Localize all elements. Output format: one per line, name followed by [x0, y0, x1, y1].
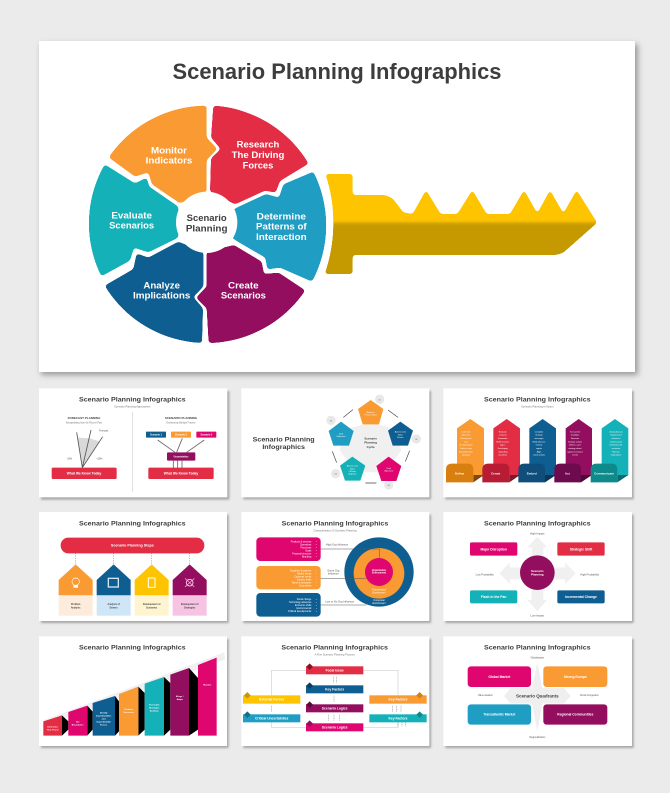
box: key factors right upper: Key Factors: [388, 698, 408, 702]
pentagon cycle diagram: Assess Cost: [395, 431, 406, 434]
segment: research the driving forces: The Driving: [232, 150, 284, 160]
center label: Scenario Quadrants: [516, 694, 559, 699]
icon: yellow key: [325, 174, 597, 274]
step: problem analysis: Problem: [71, 604, 80, 606]
step: set boundaries: [68, 706, 87, 736]
panel: ascending steps slide: [39, 636, 229, 748]
quadrant: strategic shift: Strategic Shift: [570, 547, 593, 551]
step: development of scenarios: [135, 564, 169, 616]
quadrant: strong europe: [543, 666, 607, 687]
banner: scenario planning steps: Scenario Planning Steps: [111, 544, 154, 548]
column: communicate: Clearly discuss: [609, 430, 623, 433]
box: low influence factors: Political developments: [288, 610, 312, 613]
column: communicate: [591, 419, 628, 482]
segment: determine patterns of interaction: Determine: [257, 211, 306, 221]
box: some influence factors: Industry rivals: [297, 578, 312, 581]
column: communicate: timeframes for: [610, 444, 623, 447]
slide title: [253, 436, 315, 451]
box: key factors right lower: [369, 711, 427, 722]
column: act: Test current: [570, 430, 581, 433]
column: create: Developing: [498, 448, 508, 450]
column: create: narratives: [498, 454, 507, 457]
column: create: compelling: [498, 451, 507, 453]
column: act: strategic actions: [568, 440, 582, 443]
pentagon cycle diagram: 04: [335, 474, 338, 476]
step: development of strategies: [173, 564, 207, 616]
column: create: [482, 419, 520, 482]
step: determine time frame: Determine: [47, 726, 59, 729]
quadrant: transatlantic market: [468, 704, 531, 725]
box: high influence factors: Products & services: [291, 541, 312, 544]
column: communicate: implications: [611, 454, 621, 457]
box: low influence factors: [256, 593, 321, 617]
step: identify forces: Impredictables: [96, 714, 112, 717]
quadrant: regional communities: [543, 704, 607, 725]
axis labels: Low Probability: [476, 572, 494, 576]
step: produce scenarios: Scenarios: [124, 712, 135, 714]
slide subtitle: Scenario Planning in Action: [521, 404, 554, 408]
pentagon cycle diagram: Cycle: [367, 445, 375, 449]
scenario planning column: Scenario 2: [175, 435, 188, 437]
column: embed: strategic: [535, 434, 543, 437]
influence labels: Low or No Org Influence: [325, 600, 355, 604]
step: identify forces: and: [102, 718, 106, 720]
axis labels: Low Impact: [531, 613, 544, 617]
column: act: Create: [572, 454, 579, 457]
step: set boundaries: Set: [76, 720, 80, 723]
box: some influence factors: Competitors: [299, 584, 312, 587]
concentric environment circles: [344, 537, 414, 607]
pentagon cycle diagram: Objectives: [384, 470, 393, 473]
forecast planning column: [52, 416, 117, 479]
quadrant: incremental change: [557, 590, 605, 603]
column: act: Act: [565, 471, 570, 475]
quadrant: strong europe: Strong Europe: [564, 675, 587, 679]
panel: scenario planning in action slide: [443, 388, 634, 499]
influence labels: High Org Influence: [326, 543, 349, 547]
column: communicate: importance &: [610, 434, 623, 437]
box: low influence factors: Economic shifts: [295, 604, 312, 607]
panel: scenario planning cycle slide: [241, 388, 431, 499]
slide subtitle: Characteristics Of Scenario Planning: [313, 528, 357, 532]
forecast planning column: +15%: [96, 458, 102, 460]
quadrant: flash in the pan: Flash in the Pan: [481, 595, 506, 599]
segment: monitor indicators: Monitor: [151, 145, 188, 155]
box: key factors center: Key Factors: [325, 688, 344, 692]
box: low influence factors: Social change: [297, 599, 312, 601]
step: monitor: [198, 658, 217, 736]
column: communicate: Communicate: [610, 440, 623, 443]
step: produce scenarios: Produce: [124, 709, 134, 711]
column: define: area: [464, 440, 469, 443]
segment: determine patterns of interaction: [213, 172, 326, 282]
black step shadows: [62, 668, 198, 736]
segment: research the driving forces: Forces: [243, 160, 273, 170]
step: monitor: Monitor: [203, 684, 211, 687]
axis labels: [476, 531, 600, 617]
box: high influence factors: Processes: [300, 547, 312, 550]
step: identify forces: Identify: [100, 711, 108, 714]
forecast planning column: Extrapolating from the Recent Past: [66, 421, 102, 424]
center circle: Scenario: [531, 569, 544, 573]
step: merge adapt: Merge /: [176, 696, 184, 698]
box: focal issue: [306, 663, 363, 674]
grey star cross: [504, 662, 571, 732]
column: embed: Build alliances: [533, 441, 545, 443]
wheel diagram: [89, 106, 326, 343]
forecast planning column: -15%: [67, 458, 72, 460]
pentagon cycle diagram: Value: [398, 434, 404, 436]
scenario planning column: [146, 416, 216, 479]
scenario planning column: Envisioning Multiple Futures: [166, 421, 196, 424]
column: act: against scenarios: [567, 450, 583, 453]
box: key factors right upper: [369, 692, 427, 704]
scenario planning column: What We Know Today: [164, 472, 198, 476]
segment: evaluate scenarios: Scenarios: [109, 221, 154, 231]
center circle: [520, 555, 555, 590]
column: define: Determine: [461, 430, 471, 433]
step: formulate strategies: Strategies: [149, 706, 160, 709]
scenario planning column: Scenario 1: [150, 435, 163, 437]
banner: scenario planning steps: [61, 538, 204, 553]
concentric environment circles: Environment: [372, 591, 386, 594]
step: formulate strategies: Analysis: [150, 709, 160, 712]
hub: scenario planning: [176, 192, 237, 253]
segment: monitor indicators: Indicators: [146, 155, 192, 165]
step: determine time frame: Time Frame: [47, 729, 59, 731]
slide title: Scenario Planning Infographics: [79, 396, 186, 403]
forecast planning column: Forecast: [99, 430, 109, 433]
slide title: Scenario Planning Infographics: [484, 644, 591, 651]
hub: scenario planning: Planning: [186, 224, 227, 234]
column: act: Generate: [571, 437, 580, 440]
segment: research the driving forces: Research: [237, 140, 279, 150]
quadrant: major disruption: [470, 542, 517, 556]
pentagon cycle diagram: Estimate: [367, 411, 375, 414]
scenario planning column: Uncertainties: [174, 456, 189, 459]
center circle: Planning: [531, 573, 544, 577]
slide subtitle: A Five Scenario Planning Process: [315, 652, 355, 656]
column: create: Evaluate: [499, 430, 507, 433]
panel: impact probability matrix slide: [443, 512, 634, 623]
column: create: framework: [498, 437, 507, 440]
box: some influence factors: Market trends: [297, 572, 312, 575]
box: some influence factors: Customer needs: [294, 575, 312, 578]
pentagon cycle diagram: Drivers: [397, 436, 403, 439]
pentagon cycle diagram: Scenario: [364, 436, 377, 440]
box: some influence factors: Suppliers & partners: [290, 569, 312, 572]
column: define: [446, 419, 484, 482]
segment: analyze implications: Implications: [133, 291, 190, 301]
box: some influence factors: Talent & innovation: [292, 581, 312, 584]
step: merge adapt: [170, 668, 189, 736]
slide title: Scenario Planning Infographics: [484, 520, 591, 527]
pentagon cycle diagram: 05: [330, 420, 333, 422]
pentagon cycle diagram: 03: [388, 485, 391, 487]
segment: research the driving forces: [210, 106, 309, 204]
step: produce scenarios: [119, 687, 138, 736]
forecast planning column: FORECAST PLANNING: [68, 416, 101, 420]
column: act: [554, 419, 592, 482]
pentagon cycle diagram: 01: [379, 399, 381, 401]
box: focal issue: Focal Issue: [326, 669, 344, 673]
influence labels: Some Org: [327, 568, 340, 572]
column: create: Build scenario: [496, 440, 510, 443]
column: define: Set boundaries: [459, 444, 473, 447]
column: communicate: Communicate: [594, 471, 614, 475]
step: merge adapt: Adapt: [177, 698, 183, 701]
box: scenario logics upper: Scenario Logics: [322, 707, 348, 711]
segment: evaluate scenarios: [89, 164, 178, 276]
segment: analyze implications: [105, 242, 203, 343]
title: Scenario Planning Infographics: [172, 59, 502, 84]
step: identify forces: Unpredictable: [96, 720, 112, 723]
box: low influence factors: Environmental: [296, 607, 312, 610]
slide subtitle: Scenario Planning Approaches: [114, 404, 151, 408]
column: embed: internal: [536, 444, 543, 447]
step: set boundaries: Boundaries: [72, 724, 84, 726]
segment: create scenarios: Create: [228, 280, 259, 290]
pentagon cycle diagram: Assess Cost: [347, 465, 358, 468]
column: embed: Embed: [527, 471, 537, 475]
scenario planning column: SCENARIO PLANNING: [165, 416, 198, 420]
column: define: planning: [462, 455, 470, 457]
step: development of strategies: Development of: [181, 603, 199, 606]
slide title: Scenario Planning Infographics: [281, 644, 388, 651]
box: critical uncertainties: [243, 711, 300, 722]
column: embed: Complete: [535, 430, 544, 433]
pentagon cycle diagram: [326, 395, 421, 490]
pentagon cycle diagram: 02: [415, 439, 417, 441]
step: identify forces: Forces: [100, 724, 108, 726]
column: communicate: relevance: [612, 437, 621, 440]
box: high influence factors: [256, 537, 321, 561]
concentric environment circles: Contextual: [373, 599, 385, 602]
column: act: Define a core: [569, 444, 582, 447]
slide title: Infographics: [262, 444, 305, 451]
step: determine time frame: [43, 715, 62, 736]
box: key factors center: [306, 682, 363, 693]
column: embed: [518, 419, 556, 482]
step: formulate strategies: [145, 677, 164, 736]
segment: create scenarios: Scenarios: [221, 291, 266, 301]
slide title: Scenario Planning Infographics: [79, 520, 186, 527]
step: identify forces: [93, 696, 115, 736]
step: development of scenarios: Development of: [143, 603, 161, 606]
pentagon cycle diagram: Draft: [339, 432, 344, 435]
pentagon cycle diagram: Present Value: [365, 414, 378, 417]
concentric environment circles: Transactional: [372, 588, 386, 591]
quadrant: incremental change: Incremental Change: [565, 595, 597, 599]
step: problem analysis: [59, 564, 93, 616]
pentagon cycle diagram: Value: [350, 468, 356, 470]
slide title: Scenario Planning Infographics: [282, 520, 389, 527]
box: high influence factors: Financial structure: [292, 553, 312, 556]
column: communicate: Educate: [612, 450, 621, 453]
panel: scenario quadrants slide: [443, 636, 634, 748]
box: external forces: [243, 692, 300, 704]
column: define: Assemble team: [459, 450, 473, 453]
column: define: objectives: [462, 434, 470, 437]
box: scenario logics upper: [306, 701, 363, 712]
column: define: Gather trends: [460, 447, 472, 450]
segment: determine patterns of interaction: Interaction: [256, 232, 307, 242]
column: define: Identify focal: [460, 437, 472, 440]
box: high influence factors: Goals: [305, 551, 312, 553]
panel: forecast vs scenario planning slide: [39, 388, 229, 500]
segment: analyze implications: Analyze: [143, 280, 180, 290]
step: analysis of drivers: Analysis of: [107, 603, 120, 606]
step: analysis of drivers: Drivers: [110, 607, 118, 609]
forecast planning column: What We Know Today: [67, 472, 101, 476]
grey ramp: [43, 652, 225, 726]
quadrant: strategic shift: [557, 542, 605, 556]
axis labels: Social Congestion: [580, 694, 599, 697]
panel: scenario planning steps slide: [39, 512, 229, 623]
column: create: logics: [500, 445, 505, 447]
box: key factors right lower: Key Factors: [388, 717, 408, 721]
axis labels: High Probability: [580, 572, 600, 576]
pentagon cycle diagram: Planning: [364, 441, 377, 445]
concentric environment circles: Environment: [372, 572, 386, 575]
influence labels: Influence: [328, 572, 339, 576]
pentagon cycle diagram: Objective: [348, 473, 357, 476]
column: act: strategies: [571, 434, 579, 437]
step: development of strategies: Strategies: [184, 606, 196, 609]
step: formulate strategies: Formulate: [149, 703, 160, 706]
pentagon cycle diagram: Of Each: [349, 471, 356, 473]
axis labels: Globalization: [531, 657, 545, 660]
axis labels: Value Ideation: [478, 694, 493, 697]
quadrant: global market: [468, 666, 531, 687]
panel: characteristics of scenario planning slide: [241, 512, 431, 623]
panel: main slide: [39, 41, 638, 375]
quadrant: major disruption: Major Disruption: [480, 547, 507, 551]
pentagon cycle diagram: Objectives: [336, 435, 346, 438]
quadrant: transatlantic market: Transatlantic Market: [483, 713, 516, 717]
segment: evaluate scenarios: Evaluate: [111, 210, 152, 220]
step: problem analysis: Analysis: [71, 606, 81, 609]
segment: determine patterns of interaction: Patterns of: [256, 222, 308, 232]
pentagon cycle diagram: Draft: [387, 467, 391, 470]
column: define: Define: [455, 471, 465, 475]
hub: scenario planning: Scenario: [187, 213, 227, 223]
concentric environment circles: Organization: [372, 569, 387, 572]
grey directional arrows: [499, 537, 576, 611]
column: create: Create: [491, 471, 501, 475]
panel: planning process flow slide: [241, 636, 431, 748]
box: high influence factors: Operations: [300, 544, 312, 547]
column: communicate: scenarios: [612, 447, 620, 450]
box: external forces: External Forces: [259, 698, 284, 702]
quadrant: flash in the pan: [470, 590, 517, 603]
box: scenario logics lower: Scenario Logics: [322, 726, 348, 730]
quadrant: regional communities: Regional Communities: [557, 713, 594, 717]
column: embed: messages: [534, 438, 544, 440]
column: embed: signals: [536, 448, 542, 450]
quadrant: global market: Global Market: [488, 675, 511, 679]
scenario planning column: Scenario 3: [200, 435, 213, 437]
slide title: Scenario Planning Infographics: [79, 644, 186, 651]
axis labels: Regionalization: [529, 736, 546, 739]
concentric environment circles: Environment: [372, 602, 386, 605]
box: low influence factors: Technology advances: [289, 602, 312, 604]
step: development of scenarios: Scenarios: [146, 607, 158, 609]
axis labels: High Impact: [530, 531, 545, 535]
box: critical uncertainties: Critical Uncertainties: [255, 717, 288, 721]
column: embed: Align: [537, 450, 541, 453]
slide title: Scenario Planning Infographics: [484, 396, 591, 403]
box: scenario logics lower: [306, 720, 363, 731]
column: create: scenario: [499, 434, 507, 437]
influence labels: [325, 543, 355, 604]
step: analysis of drivers: [97, 564, 131, 616]
column: embed: conversations: [533, 454, 545, 457]
segment: monitor indicators: [109, 106, 217, 203]
slide title: Scenario Planning: [253, 436, 315, 443]
column: act: strategy robust: [568, 447, 582, 450]
box: some influence factors: [256, 566, 321, 589]
segment: create scenarios: [196, 245, 305, 343]
box: high influence factors: Branding: [302, 556, 312, 559]
axis labels: [478, 657, 599, 739]
